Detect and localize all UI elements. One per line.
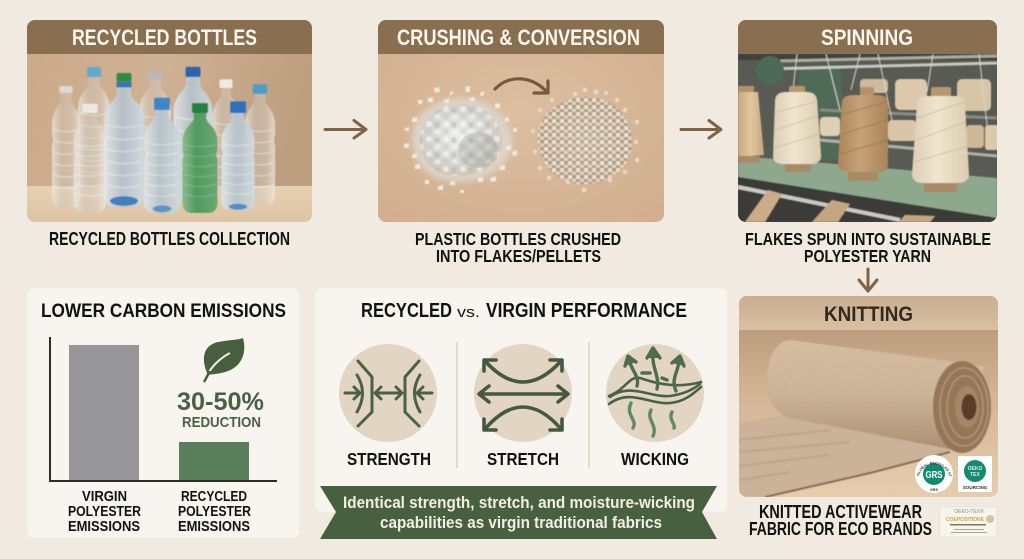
bar label: recycled: EMISSIONS xyxy=(178,519,250,535)
badge: OEKO-TEX sourcing: OEKO xyxy=(968,466,982,472)
caption: crushed into flakes xyxy=(415,229,621,266)
icon: leaf xyxy=(204,338,244,382)
bar label: virgin: POLYESTER xyxy=(68,504,141,520)
ribbon banner xyxy=(320,486,717,539)
stat: 30-50% reduction xyxy=(177,388,264,431)
arrow: spinning to knitting xyxy=(859,269,877,291)
flakes pile xyxy=(404,86,517,193)
arrow: crushing to spinning xyxy=(681,120,721,138)
certificate label: OEKO-TEX: COEPOSITIONE xyxy=(946,517,984,523)
arrow: bottles to crushing xyxy=(325,120,366,138)
icon: wicking xyxy=(606,344,704,442)
bar label: virgin: VIRGIN xyxy=(82,489,127,505)
badge: GRS: GRS xyxy=(930,488,938,492)
caption: spun into yarn: POLYESTER YARN xyxy=(804,246,931,266)
bar: virgin polyester xyxy=(69,345,139,480)
label: stretch: STRETCH xyxy=(487,449,559,469)
badge: GRS: GRS xyxy=(926,469,942,481)
heading: performance xyxy=(361,300,687,322)
badge: OEKO-TEX sourcing: SOURCING xyxy=(963,485,988,490)
spinning machine photo xyxy=(738,54,999,222)
icon: strength xyxy=(339,344,437,442)
heading: performance: RECYCLED xyxy=(361,300,452,322)
badge: OEKO-TEX sourcing xyxy=(958,456,992,492)
caption: recycled bottles collection: RECYCLED BOTTLES COLLECTION xyxy=(49,229,290,249)
heading: crushing and conversion: CRUSHING & CONVERSION xyxy=(397,25,640,50)
bar: recycled polyester xyxy=(179,442,249,480)
certificate label: OEKO-TEX xyxy=(940,507,997,537)
panel: spinning xyxy=(738,20,999,222)
heading: spinning: SPINNING xyxy=(821,25,913,50)
heading: knitting: KNITTING xyxy=(824,303,913,326)
bar label: recycled xyxy=(178,489,251,535)
ribbon banner: Identical strength, stretch, and moisture-wicking xyxy=(343,494,695,512)
pellets pile xyxy=(531,88,639,192)
label: strength: STRENGTH xyxy=(347,449,431,469)
panel: crushing and conversion xyxy=(378,20,664,222)
bar label: virgin xyxy=(68,489,141,535)
caption: knitted activewear xyxy=(749,502,932,539)
caption: spun into yarn xyxy=(745,229,991,266)
heading: recycled bottles: RECYCLED BOTTLES xyxy=(72,25,257,50)
bar label: recycled: RECYCLED xyxy=(181,489,247,505)
bar chart xyxy=(50,337,277,481)
heading: performance: vs. xyxy=(457,304,480,321)
panel: recycled bottles xyxy=(27,20,312,222)
heading: performance: VIRGIN PERFORMANCE xyxy=(486,300,687,322)
caption: crushed into flakes: PLASTIC BOTTLES CRUSHED xyxy=(415,229,621,249)
stat: 30-50% reduction: REDUCTION xyxy=(182,414,261,431)
badge: GRS: GLOBAL RECYCLED STANDARD xyxy=(916,462,952,476)
bar label: recycled: POLYESTER xyxy=(178,504,251,520)
icon: stretch xyxy=(474,344,572,442)
certificate label: OEKO-TEX: OEKO-TEX® xyxy=(954,508,984,515)
fabric roll photo xyxy=(739,340,991,497)
caption: knitted activewear: KNITTED ACTIVEWEAR xyxy=(759,502,922,522)
label: wicking: WICKING xyxy=(621,449,689,469)
heading: lower carbon emissions: LOWER CARBON EMISSIONS xyxy=(41,300,286,322)
panel: lower carbon emissions xyxy=(27,288,299,538)
caption: crushed into flakes: INTO FLAKES/PELLETS xyxy=(436,246,601,266)
caption: knitted activewear: FABRIC FOR ECO BRANDS xyxy=(749,519,932,539)
bottle group photo xyxy=(52,67,275,213)
panel: knitting xyxy=(739,296,998,497)
badge: OEKO-TEX sourcing: TEX xyxy=(970,472,981,478)
icon: curved arrow flakes to pellets xyxy=(495,79,548,93)
panel: recycled vs virgin performance xyxy=(315,288,727,539)
bar label: virgin: EMISSIONS xyxy=(68,519,140,535)
stat: 30-50% reduction: 30-50% xyxy=(177,388,264,416)
ribbon banner: capabilities as virgin traditional fabrics xyxy=(380,514,662,532)
